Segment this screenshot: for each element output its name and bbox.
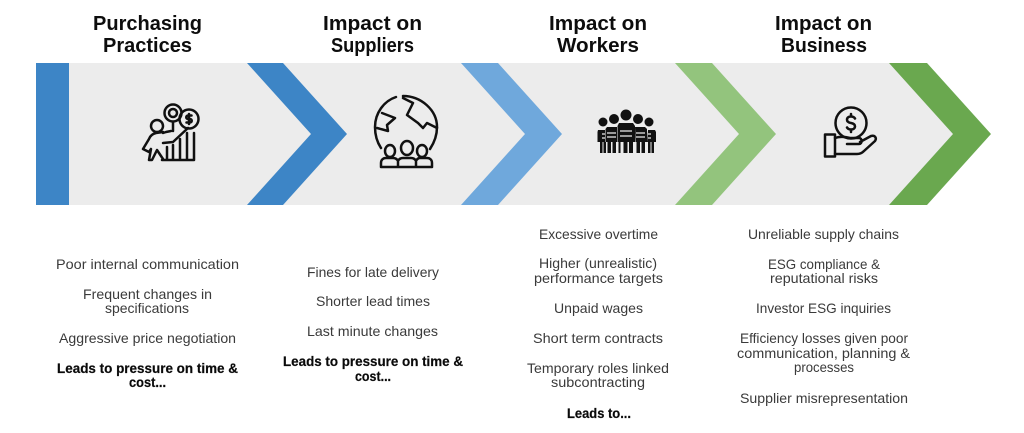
text block: purchasing practices: Frequent changes in (83, 287, 212, 302)
heading: Purchasing Practices (93, 13, 202, 57)
chevron arrow 4 (889, 63, 991, 205)
text block: impact on workers: Short term contracts (533, 331, 663, 346)
text block: impact on suppliers: Last minute changes (307, 324, 438, 339)
text block: impact on business: Investor ESG inquiries (756, 301, 891, 316)
text block: impact on workers: Temporary roles linked (527, 361, 669, 376)
start bar (36, 63, 69, 205)
text block: purchasing practices: Aggressive price negotiation (59, 331, 236, 346)
text block: purchasing practices: cost... (129, 375, 166, 390)
text block: impact on suppliers: Fines for late delivery (307, 265, 439, 280)
icon: hand holding dollar coin (825, 108, 876, 156)
text block: purchasing practices: specifications (105, 301, 189, 316)
heading: Impact on Suppliers (323, 13, 422, 57)
text block: impact on suppliers (283, 265, 463, 384)
text block: impact on business: Efficiency losses given poor (740, 331, 908, 346)
heading: Purchasing Practices: Practices (103, 35, 192, 57)
text block: impact on workers: Higher (unrealistic) (539, 256, 657, 271)
text block: impact on business: Unreliable supply chains (748, 227, 899, 242)
heading: Purchasing Practices: Purchasing (93, 13, 202, 35)
text block: impact on business: communication, planning & (737, 346, 910, 361)
text block: impact on business: reputational risks (770, 271, 878, 286)
heading: Impact on Workers (549, 13, 647, 57)
heading: Impact on Workers: Impact on (549, 13, 647, 35)
heading: Impact on Suppliers: Suppliers (331, 35, 414, 57)
heading: Impact on Business: Business (781, 35, 867, 57)
text block: purchasing practices: Poor internal communication (56, 257, 239, 272)
text block: impact on workers: subcontracting (551, 375, 645, 390)
heading: Impact on Workers: Workers (557, 35, 639, 57)
heading: Impact on Business: Impact on (775, 13, 872, 35)
text block: impact on workers: Unpaid wages (554, 301, 643, 316)
heading: Impact on Suppliers: Impact on (323, 13, 422, 35)
process band background (36, 63, 953, 205)
text block: impact on suppliers: Leads to pressure on time & (283, 354, 463, 369)
text block: impact on workers: Leads to... (567, 406, 631, 421)
text block: impact on business: ESG compliance & (768, 257, 880, 272)
text block: impact on suppliers: cost... (355, 369, 391, 384)
chevron arrow 2 (461, 63, 562, 205)
text block: impact on business: Supplier misrepresentation (740, 391, 908, 406)
text block: impact on workers (527, 227, 669, 421)
chevron arrow 3 (675, 63, 776, 205)
chevron arrow 1 (247, 63, 347, 205)
icon: group of construction workers (598, 110, 656, 153)
text block: purchasing practices: Leads to pressure on time & (57, 361, 238, 376)
text block: impact on suppliers: Shorter lead times (316, 294, 430, 309)
heading: Impact on Business (775, 13, 872, 57)
icon: person with growth chart and coins (143, 104, 198, 160)
text block: impact on workers: performance targets (534, 271, 663, 286)
text block: impact on business (737, 227, 910, 406)
icon: globe with people (375, 96, 437, 167)
text block: purchasing practices (56, 257, 239, 390)
text block: impact on business: processes (794, 360, 854, 375)
text block: impact on workers: Excessive overtime (539, 227, 658, 242)
